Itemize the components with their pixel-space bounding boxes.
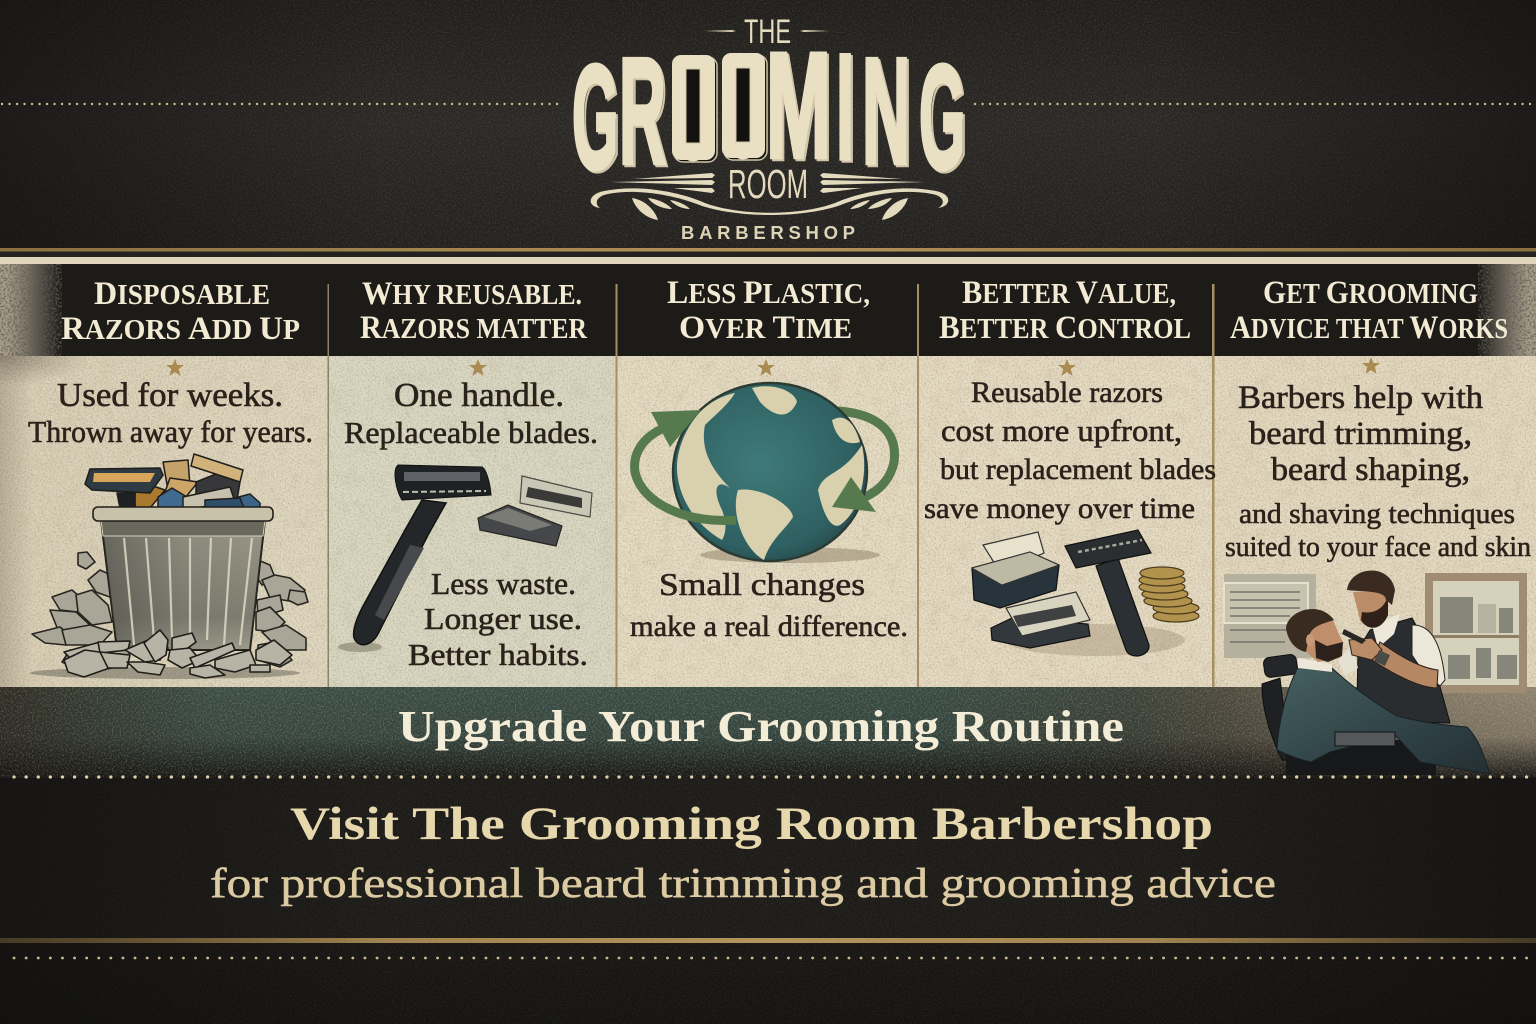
- heading: why reusable razors matter: RAZORS MATTER: [360, 310, 588, 346]
- logo: dash left: [704, 30, 736, 32]
- client ear: [1306, 634, 1314, 646]
- heading: less plastic over time: OVER TIME: [679, 310, 852, 346]
- body text: but replacement blades: [940, 453, 1216, 486]
- ground scuffs: [30, 667, 300, 679]
- heading: less plastic over time: LESS PLASTIC,: [667, 275, 870, 311]
- heading: disposable razors: RAZORS ADD UP: [61, 311, 300, 347]
- shelf frame: [1429, 577, 1523, 689]
- left arrow tail: [635, 428, 736, 521]
- logo: Grooming wordmark: G: [572, 34, 619, 199]
- logo: Grooming wordmark: I: [836, 23, 854, 191]
- illustration: barber and client: [1224, 570, 1523, 775]
- logo: Room: ROOM: [728, 161, 808, 207]
- can body shading: [101, 520, 265, 650]
- body text: save money over time: [924, 492, 1195, 525]
- lower dark band: [0, 778, 1536, 938]
- heading: better value better control: [939, 275, 1191, 346]
- body text: Thrown away for years.: [28, 414, 313, 449]
- body text: make a real difference.: [630, 610, 908, 643]
- box top: [972, 552, 1059, 585]
- logo: Grooming wordmark: G: [919, 34, 966, 199]
- body text: Small changes: [659, 566, 865, 602]
- panel 1 content: [28, 276, 313, 679]
- clippers: [1342, 629, 1366, 644]
- heading: better value better control: BETTER VALUE,: [962, 275, 1176, 311]
- body text top: Replaceable blades.: [344, 415, 598, 450]
- chair headrest: [1263, 654, 1298, 678]
- barber sleeve: [1412, 625, 1445, 686]
- rubble pile back: [32, 552, 308, 673]
- barber watch: [1374, 650, 1390, 666]
- cream rule strip: [0, 257, 1536, 264]
- razors in can: [85, 454, 260, 508]
- banner grain: [0, 687, 1536, 777]
- razor handle: [1096, 558, 1149, 656]
- dotted rule mid: [14, 775, 1536, 779]
- star 3: [757, 359, 775, 376]
- heading: get grooming advice: [1230, 275, 1508, 346]
- panel: grooming advice background: [1214, 356, 1536, 688]
- panel 5 content: [1224, 275, 1531, 775]
- body text: [28, 377, 313, 449]
- panel top left shade: [0, 356, 90, 386]
- panel: better value background: [919, 356, 1214, 688]
- parchment mottling: [0, 356, 1536, 688]
- body text bottom: [408, 566, 588, 672]
- call to action heading: Visit The Grooming Room Barbershop: [290, 798, 1213, 850]
- lower blade box: [991, 618, 1090, 648]
- footer grain: [0, 778, 1536, 1024]
- logo: [572, 13, 968, 243]
- page side vignette: [0, 0, 1536, 248]
- client hair: [1286, 609, 1334, 652]
- footer side vignette: [0, 778, 1536, 1024]
- body text: Reusable razors: [971, 376, 1163, 409]
- coins: [1139, 567, 1199, 622]
- can upper band: [101, 520, 265, 536]
- globe shadow: [700, 547, 880, 563]
- header left fade gradient: [8, 264, 60, 356]
- razor head: [395, 465, 491, 500]
- body text top: [344, 377, 598, 450]
- body text: [924, 376, 1216, 525]
- front rubble: [64, 630, 292, 678]
- logo: Grooming wordmark: O: [671, 29, 715, 188]
- box paper: [983, 532, 1044, 572]
- razor head: [1065, 530, 1151, 568]
- logo: Grooming wordmark: [572, 23, 968, 201]
- blade envelope: [520, 476, 592, 517]
- dotted rule bottom: [14, 957, 1536, 959]
- panel 3 content: [630, 275, 908, 643]
- heading: disposable razors: DISPOSABLE: [94, 276, 270, 312]
- gold rule bottom: [0, 938, 1536, 943]
- lower wrapper label: [1013, 605, 1076, 627]
- body text top: One handle.: [394, 377, 564, 414]
- blade box top: [484, 508, 552, 531]
- left arrow head: [651, 410, 701, 447]
- can ribs: [124, 538, 252, 645]
- heading: why reusable razors matter: [360, 276, 588, 346]
- parchment light grain: [0, 356, 1536, 687]
- column divider 2: [616, 284, 618, 687]
- heading: why reusable razors matter: WHY REUSABLE.: [362, 276, 582, 312]
- logo: dash right: [800, 30, 830, 32]
- can body: [101, 520, 265, 650]
- lower blade wrapper: [1006, 592, 1090, 636]
- ground shadow: [1005, 624, 1185, 656]
- logo: Grooming wordmark: G: [574, 36, 621, 201]
- header left fade base: [0, 264, 60, 356]
- body text: beard shaping,: [1271, 452, 1470, 488]
- barber shirt collar: [1372, 614, 1400, 648]
- logo: Grooming wordmark: R: [621, 29, 668, 197]
- blade box: [972, 552, 1059, 608]
- body text: beard trimming,: [1249, 416, 1472, 452]
- star 4: [1058, 359, 1076, 376]
- barber vest: [1357, 618, 1450, 723]
- logo: Grooming wordmark: R: [619, 27, 666, 195]
- client beard: [1315, 640, 1343, 662]
- right arrow tail: [838, 411, 895, 500]
- header right fade gradient: [1480, 264, 1528, 356]
- razor handle: [354, 500, 446, 645]
- green banner: [0, 687, 1536, 777]
- body text bottom: Less waste.: [431, 566, 576, 601]
- razor head shine: [404, 472, 480, 481]
- body text: suited to your face and skin: [1225, 531, 1531, 563]
- body text: and shaving techniques: [1239, 498, 1515, 530]
- shelf bottles: [1433, 597, 1519, 679]
- logo: Grooming wordmark: I: [838, 25, 856, 193]
- logo: Grooming wordmark: M: [766, 23, 831, 190]
- heading: less plastic over time: [667, 275, 870, 346]
- right arrow head: [832, 477, 876, 512]
- razor handle highlight: [375, 545, 424, 620]
- blade envelope label: [526, 487, 582, 508]
- body text bottom: Better habits.: [408, 637, 588, 672]
- icon: reusable razor: [338, 465, 592, 652]
- header right fade base: [1480, 264, 1536, 356]
- barber hair: [1347, 570, 1395, 605]
- logo: Grooming wordmark: G: [921, 36, 968, 201]
- barber face: [1353, 590, 1388, 626]
- dotted rule left: [2, 103, 560, 105]
- logo: The: THE: [744, 13, 791, 51]
- header left speckle: [0, 264, 62, 356]
- body text: Used for weeks.: [57, 377, 283, 414]
- header band: [60, 264, 1480, 356]
- banner text: Upgrade Your Grooming Routine: [398, 702, 1124, 751]
- star 5: [1362, 357, 1380, 374]
- blade box: [478, 505, 562, 546]
- can rim: [93, 507, 273, 521]
- chair arm: [1335, 732, 1395, 746]
- icon: trash can of disposable razors: [30, 454, 308, 679]
- logo: Grooming wordmark: O: [721, 27, 765, 186]
- heading: get grooming advice: GET GROOMING: [1263, 275, 1478, 311]
- dark grain: [0, 0, 1536, 248]
- column divider 1: [328, 284, 329, 687]
- body text bottom: Longer use.: [424, 601, 582, 636]
- heading: disposable razors: [61, 276, 300, 347]
- logo: Grooming wordmark: N: [864, 28, 912, 197]
- globe sphere: [673, 383, 867, 561]
- panel: disposable razors background: [0, 356, 329, 688]
- star 1: [166, 359, 184, 376]
- chair back: [1262, 678, 1290, 760]
- razor head detail: [1078, 540, 1142, 552]
- client cape: [1277, 667, 1490, 774]
- star 2: [469, 359, 487, 376]
- column divider 4: [1212, 284, 1214, 687]
- body text: cost more upfront,: [941, 413, 1182, 448]
- panel 4 content: [924, 275, 1216, 656]
- barber far sleeve: [1338, 645, 1358, 676]
- framed certificate: [1224, 574, 1316, 658]
- panel: less plastic background: [617, 356, 919, 688]
- parchment dark grain: [0, 356, 1536, 687]
- logo: Grooming wordmark: N: [862, 26, 910, 195]
- client face: [1300, 620, 1343, 662]
- banner bottom fade: [0, 687, 1536, 777]
- icon: globe with recycling arrows: [635, 383, 895, 563]
- call to action subheading: for professional beard trimming and grooming advice: [210, 861, 1276, 907]
- dotted rule right: [975, 103, 1536, 105]
- heading: get grooming advice: ADVICE THAT WORKS: [1230, 310, 1508, 346]
- heading: better value better control: BETTER CONTROL: [939, 310, 1191, 346]
- certificate lines: [1230, 592, 1300, 642]
- barber forearm: [1372, 642, 1438, 688]
- header right speckle: [1478, 264, 1536, 356]
- client collar: [1298, 658, 1332, 672]
- razor shadow: [338, 642, 382, 652]
- barber beard: [1361, 596, 1388, 628]
- certificate inner: [1224, 583, 1308, 623]
- body text: [630, 566, 908, 643]
- gold rule top: [0, 248, 1536, 252]
- body text: Barbers help with: [1238, 380, 1484, 416]
- icon: razor, blades and coins: [972, 530, 1199, 656]
- logo: Barbershop: BARBERSHOP: [681, 222, 855, 243]
- panel: reusable razors background: [329, 356, 617, 688]
- panel 2 content: [338, 276, 598, 672]
- logo: Grooming wordmark: M: [768, 25, 833, 192]
- barber hand: [1349, 638, 1382, 660]
- body text: [1225, 380, 1531, 563]
- logo: flourish: [591, 173, 948, 220]
- chair base: [1286, 740, 1436, 775]
- globe continents: [677, 386, 864, 560]
- razor blade edge: [403, 491, 486, 492]
- column divider 3: [917, 284, 919, 687]
